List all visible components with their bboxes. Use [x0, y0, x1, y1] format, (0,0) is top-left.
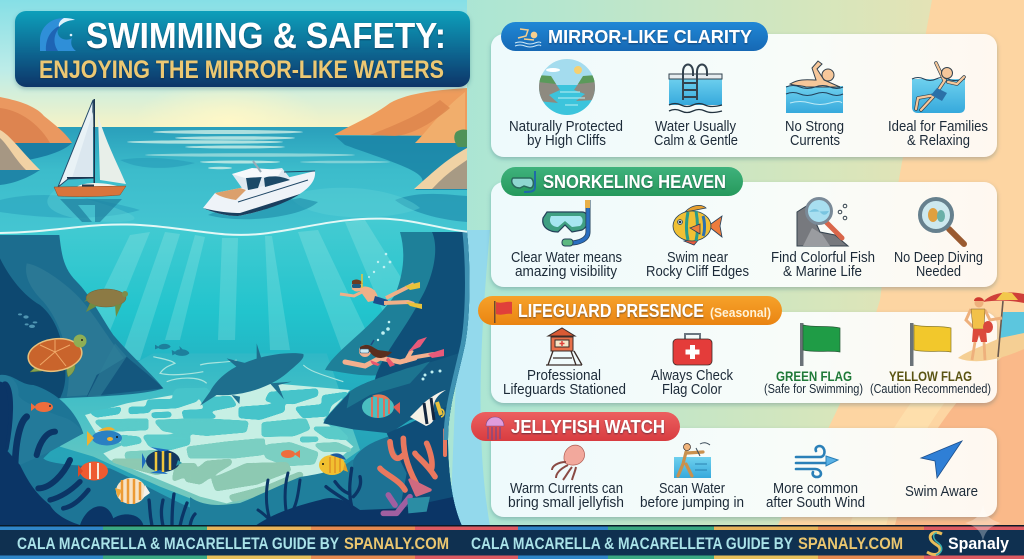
- icon: first aid kit: [673, 334, 712, 365]
- logo: Spanaly: [927, 532, 1010, 555]
- small turtle: [84, 289, 128, 317]
- item: families: Ideal for Families: [888, 118, 988, 135]
- title banner: [15, 11, 470, 87]
- left cliffs: [0, 97, 72, 170]
- heading pill: [471, 412, 680, 441]
- caustic cells upper: [92, 389, 347, 418]
- item: calm water: [654, 64, 738, 149]
- tiny orange fish: [281, 450, 300, 458]
- item: scan water: Scan Water: [659, 480, 725, 497]
- sparkle watermark: [965, 505, 1001, 541]
- snorkeler woman: [345, 337, 444, 367]
- icon: swimmer: [515, 29, 541, 47]
- small fish school mark: [18, 313, 37, 328]
- item: marine life: Find Colorful Fish: [771, 249, 875, 266]
- item: yellow flag: [870, 323, 991, 396]
- bottom right silhouette: [256, 497, 462, 525]
- item: no strong currents: Currents: [790, 132, 840, 149]
- heading pill: LIFEGUARD PRESENCE: [518, 301, 704, 321]
- sun glow: [171, 89, 286, 126]
- icon: magnifier with fish: [920, 199, 964, 244]
- motor boat: [203, 161, 318, 219]
- item: marine life: & Marine Life: [783, 263, 862, 280]
- item: clear water: amazing visibility: [515, 263, 617, 280]
- sea shading and reflections: [0, 130, 467, 222]
- icon: wave: [40, 18, 76, 51]
- coral: [380, 430, 445, 513]
- bubbles: [368, 253, 442, 380]
- item: protected by cliffs: by High Cliffs: [527, 132, 606, 149]
- icon: purple jellyfish: [486, 417, 504, 440]
- bottom seaweed: [149, 494, 195, 526]
- footer text right: SPANALY.COM: [798, 535, 903, 553]
- heading pill: [478, 296, 782, 325]
- item: rocky edges: Swim near: [667, 249, 728, 266]
- lifeguard on beach illustration: [958, 292, 1024, 361]
- item: families: [888, 63, 988, 149]
- distant fish silhouettes: [155, 344, 189, 356]
- item: yellow flag: (Caution Recommended): [870, 382, 991, 396]
- icon: snorkel mask: [543, 200, 590, 246]
- icon: red flag: [494, 301, 512, 323]
- panel: jellyfish watch: [471, 412, 997, 517]
- item: lifeguards: [503, 328, 626, 398]
- sky: [0, 0, 470, 128]
- panel: lifeguard presence: [478, 296, 997, 403]
- icon: lifeguard tower: [546, 328, 582, 365]
- heading pill: (Seasonal): [710, 305, 771, 320]
- caustic cells middle: [97, 420, 347, 448]
- title line 1: SWIMMING & SAFETY:: [86, 15, 446, 56]
- tropical fish group: [31, 390, 446, 504]
- lower left mound: [0, 375, 200, 525]
- sun rays: [96, 220, 400, 360]
- heading pill: [501, 22, 768, 51]
- item: scan water: [640, 443, 744, 511]
- striped angelfish: [142, 447, 182, 474]
- item: south wind: More common: [773, 480, 858, 497]
- item: calm water: Calm & Gentle: [654, 132, 738, 149]
- centre seaweed: [258, 473, 300, 522]
- item: green flag: GREEN FLAG: [776, 368, 852, 384]
- footer text left: CALA MACARELLA & MACARELLETA GUIDE BY: [17, 535, 339, 553]
- icon: mask: [512, 171, 535, 192]
- item: warm currents: bring small jellyfish: [508, 494, 624, 511]
- item: no deep diving: Needed: [916, 263, 961, 280]
- sea floor: [57, 343, 360, 510]
- item: families: & Relaxing: [907, 132, 970, 149]
- waterline: [0, 219, 470, 235]
- orange fish: [31, 402, 53, 412]
- footer text right: CALA MACARELLA & MACARELLETA GUIDE BY: [471, 535, 793, 553]
- item: green flag: (Safe for Swimming): [764, 382, 863, 396]
- heading pill: [501, 167, 743, 196]
- item: lifeguards: Lifeguards Stationed: [503, 381, 626, 398]
- snorkeler man: [340, 274, 422, 309]
- heading pill: JELLYFISH WATCH: [511, 417, 665, 437]
- item: protected by cliffs: [509, 58, 623, 149]
- item: calm water: Water Usually: [655, 118, 736, 135]
- item: no strong currents: [785, 61, 844, 149]
- item: rocky edges: [646, 205, 749, 280]
- item: marine life: [771, 198, 875, 280]
- dark seaweed silhouettes: [5, 385, 88, 508]
- item: flag colour: Always Check: [651, 367, 733, 384]
- icon: relaxing in water: [912, 63, 965, 113]
- item: lifeguards: Professional: [527, 367, 601, 384]
- item: south wind: after South Wind: [766, 494, 865, 511]
- icon: jellyfish: [552, 445, 585, 480]
- icon: tropical fish: [673, 205, 722, 245]
- item: flag colour: [651, 334, 733, 398]
- large turtle: [26, 334, 86, 377]
- item: clear water: [511, 200, 622, 280]
- blue fish: [87, 427, 122, 446]
- moorish idol: [410, 390, 446, 426]
- caustic cells lower: [127, 440, 350, 464]
- icon: yellow flag: [910, 323, 951, 366]
- underwater gradient: [43, 235, 470, 522]
- item: flag colour: Flag Color: [662, 381, 722, 398]
- item: rocky edges: Rocky Cliff Edges: [646, 263, 749, 280]
- item: no deep diving: No Deep Diving: [894, 249, 983, 266]
- right seaweed: [326, 468, 361, 507]
- sailboat: [54, 99, 126, 222]
- item: warm currents: [508, 445, 624, 511]
- panel: mirror-like clarity: [491, 22, 997, 157]
- rainbow fish: [362, 394, 400, 418]
- yellow fish: [319, 453, 348, 475]
- illustration: bay scene above and below water: [0, 0, 470, 530]
- butterfly fish: [115, 478, 150, 504]
- heading pill: SNORKELING HEAVEN: [543, 172, 726, 192]
- icon: green flag: [800, 323, 840, 366]
- logo: Spanaly: Spanaly: [948, 534, 1010, 553]
- footer text left: SPANALY.COM: [344, 535, 449, 553]
- clown fish: [78, 462, 108, 480]
- item: swim aware: Swim Aware: [905, 483, 978, 500]
- item: swim aware: [905, 441, 978, 500]
- pale edge band: [448, 232, 469, 440]
- icon: swimmer in water: [786, 61, 843, 113]
- item: green flag: [764, 323, 863, 396]
- item: protected by cliffs: Naturally Protected: [509, 118, 623, 135]
- title line 2: ENJOYING THE MIRROR-LIKE WATERS: [39, 56, 444, 84]
- icon: wind arrow: [796, 446, 838, 477]
- sea surface: [0, 127, 470, 235]
- right lower rock walls: [255, 350, 470, 527]
- right cliffs: [334, 88, 467, 189]
- heading pill: MIRROR-LIKE CLARITY: [548, 27, 752, 47]
- item: warm currents: Warm Currents can: [510, 480, 623, 497]
- bottom teal seabed: [190, 430, 460, 530]
- colour strips: [0, 526, 1024, 559]
- pale caustic network base: [85, 383, 353, 503]
- icon: cove: [538, 58, 596, 117]
- icon: person scanning water: [674, 443, 711, 478]
- item: no deep diving: [894, 199, 983, 280]
- footer bar: [0, 525, 1024, 559]
- left rock wall: [0, 235, 200, 525]
- icon: pool ladder: [669, 64, 722, 112]
- item: south wind: [766, 446, 865, 511]
- item: clear water: Clear Water means: [511, 249, 622, 266]
- caustic cells bottom: [113, 461, 302, 500]
- icon: rock with magnifier: [797, 198, 848, 246]
- icon: navigation arrow: [921, 441, 962, 478]
- panel: snorkeling heaven: [491, 167, 997, 287]
- shark shadow: [200, 343, 304, 406]
- item: scan water: before jumping in: [640, 494, 744, 511]
- thin caustic lines: [153, 357, 343, 383]
- right upper rock wall: [325, 232, 470, 395]
- item: yellow flag: YELLOW FLAG: [889, 368, 972, 384]
- item: no strong currents: No Strong: [785, 118, 844, 135]
